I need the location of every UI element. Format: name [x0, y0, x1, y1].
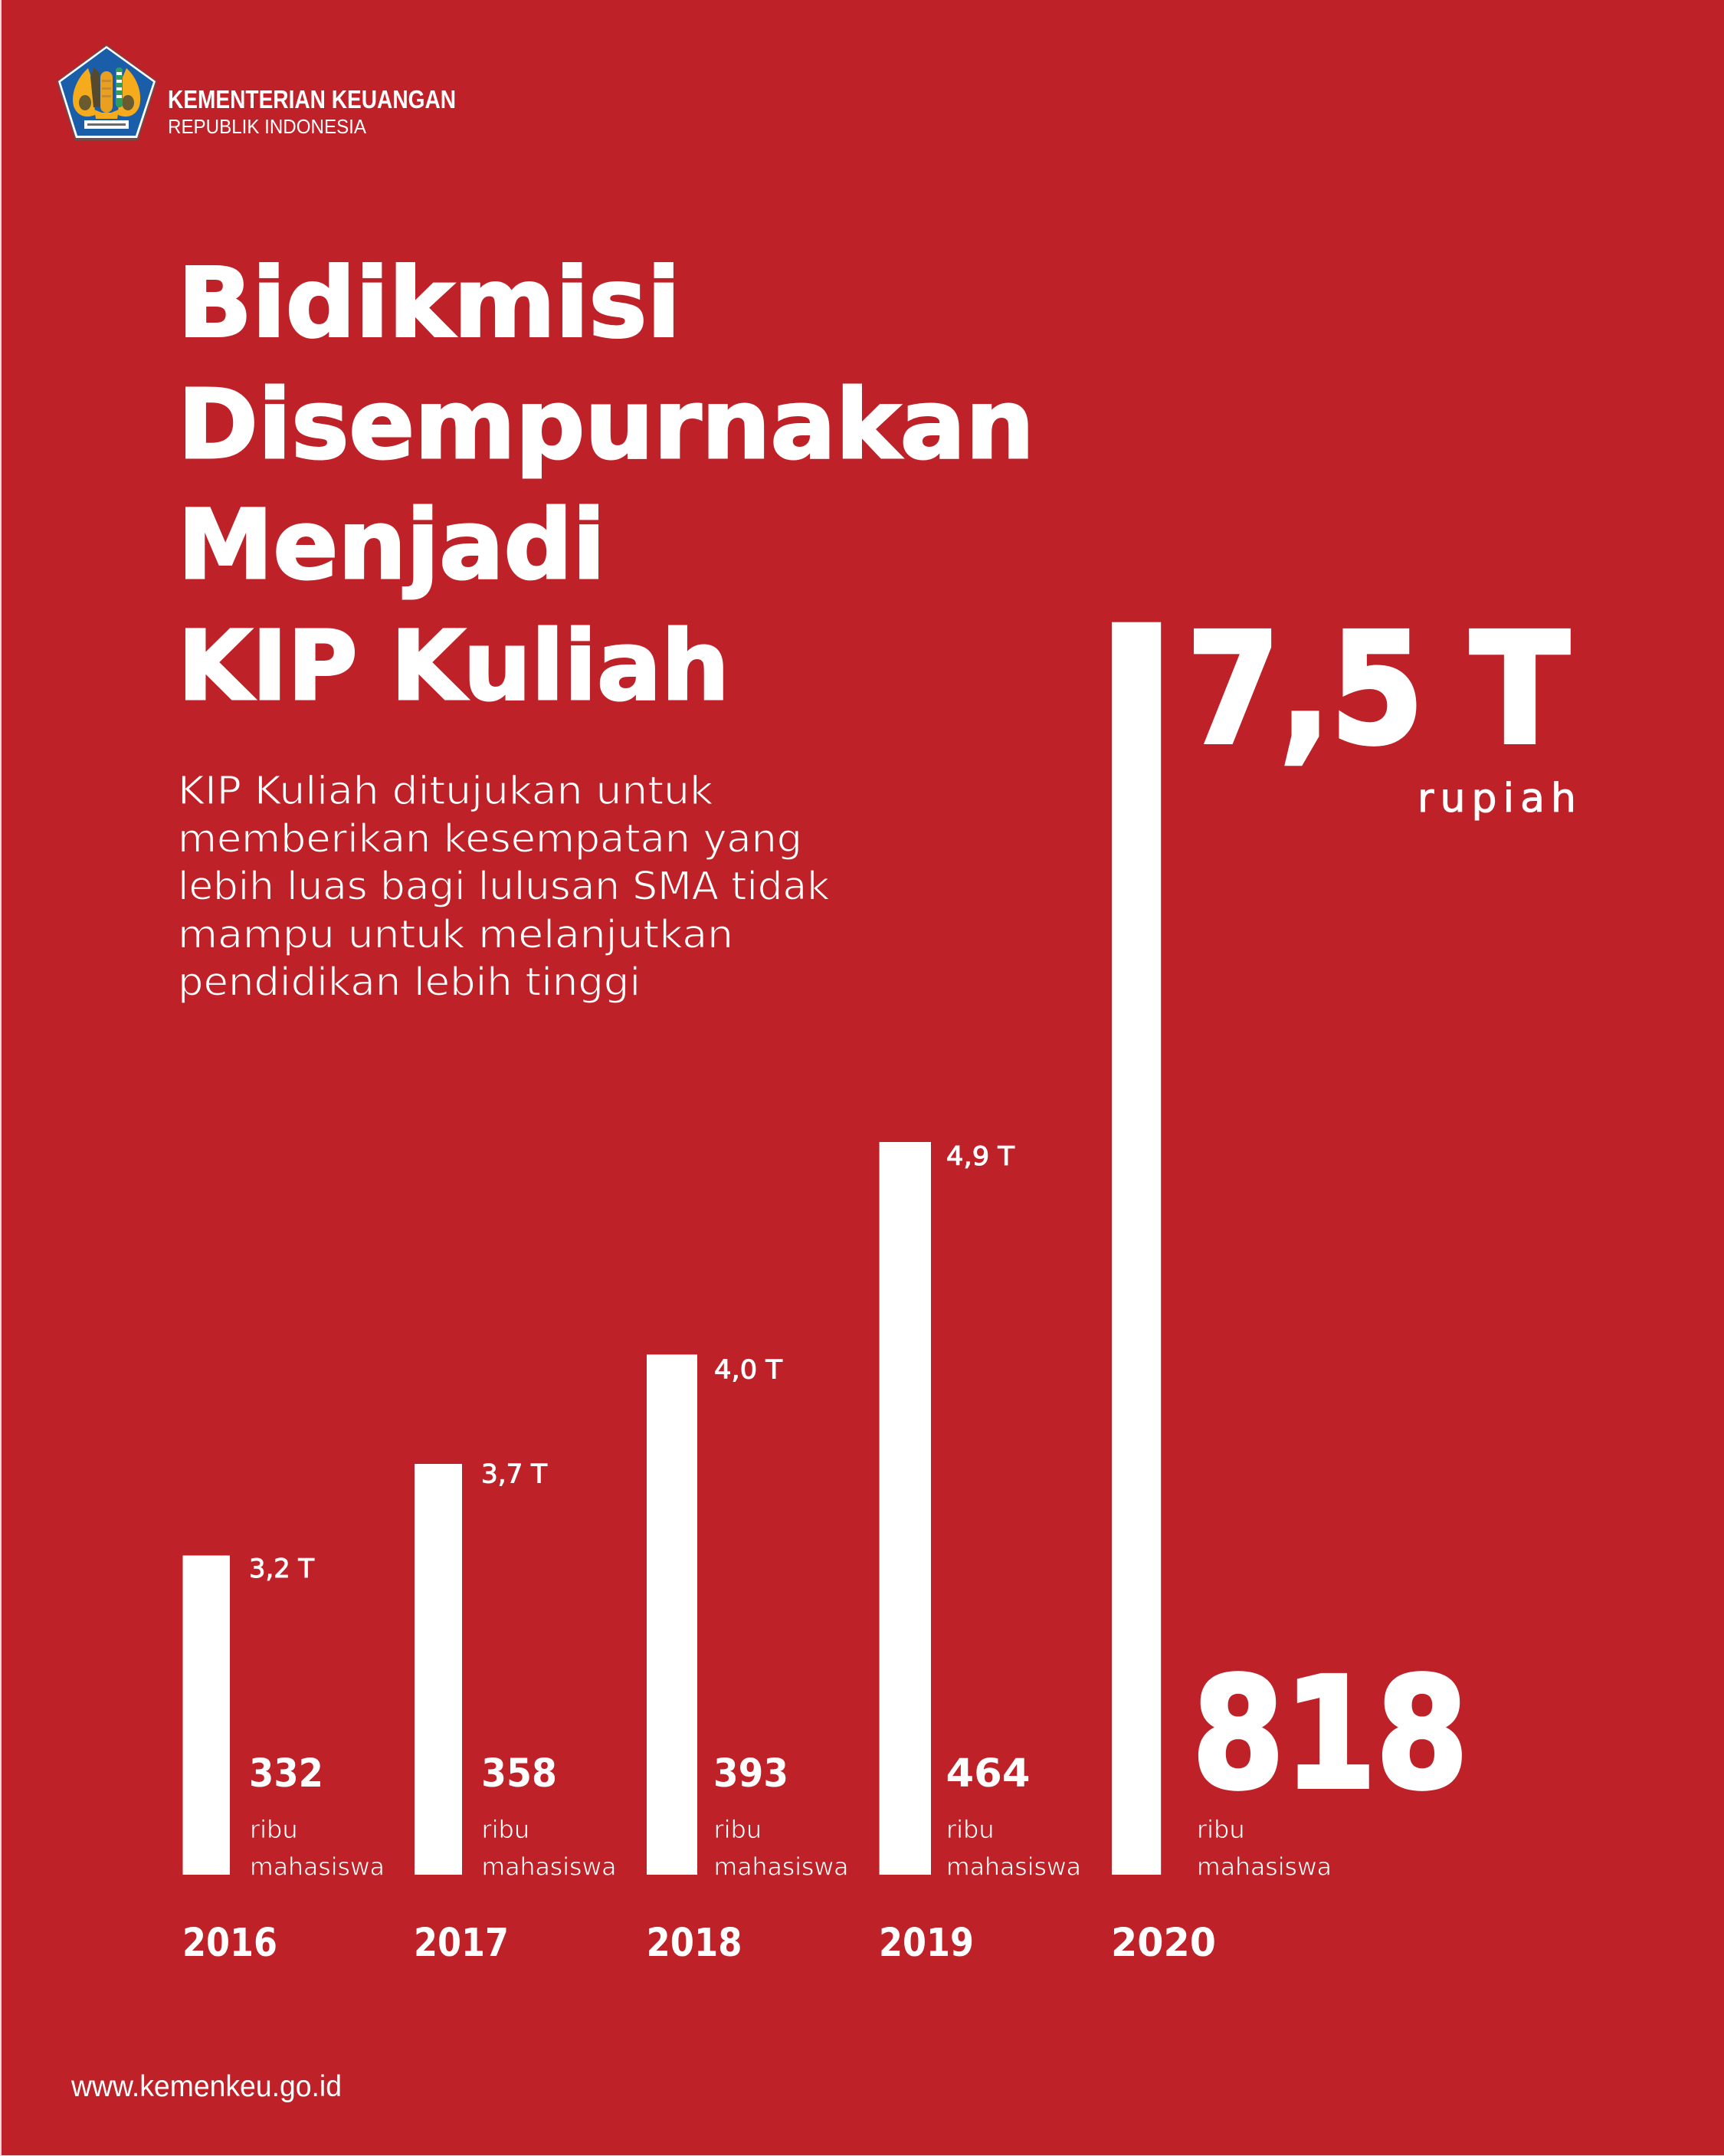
intro paragraph: mampu untuk melanjutkan [178, 912, 733, 958]
column 2019 [879, 1141, 1081, 1966]
intro paragraph: KIP Kuliah ditujukan untuk [178, 769, 713, 814]
column 2016: ribu [250, 1815, 298, 1844]
column 2018: 4,0 T [714, 1355, 782, 1386]
column 2017: mahasiswa [481, 1852, 616, 1881]
intro paragraph [178, 769, 830, 1006]
column 2019: mahasiswa [946, 1852, 1081, 1881]
column 2018: mahasiswa [714, 1852, 849, 1881]
intro paragraph: memberikan kesempatan yang [178, 817, 802, 861]
column 2020: ribu [1197, 1815, 1245, 1844]
column 2016 [182, 1554, 385, 1966]
column 2020: T [1470, 600, 1569, 778]
column 2019: 4,9 T [946, 1141, 1014, 1172]
icon: ministry crest [57, 44, 157, 140]
column 2018: 393 [713, 1751, 788, 1797]
column 2017: 3,7 T [481, 1459, 547, 1490]
column 2020: 7,5 [1187, 600, 1424, 778]
title: Menjadi [178, 490, 605, 601]
column 2020 [1111, 600, 1576, 1966]
column 2016: 2016 [182, 1921, 277, 1966]
column 2020: 818 [1192, 1645, 1468, 1823]
column 2016: mahasiswa [250, 1852, 385, 1881]
intro paragraph: lebih luas bagi lulusan SMA tidak [178, 865, 830, 909]
column 2019: 464 [946, 1751, 1030, 1797]
column 2017: 358 [481, 1751, 557, 1797]
title: Bidikmisi [178, 248, 680, 359]
intro paragraph: pendidikan lebih tinggi [178, 960, 641, 1006]
column 2017: ribu [481, 1815, 529, 1844]
bar chart: budget and students by year [182, 600, 1576, 1966]
column 2018: ribu [714, 1815, 762, 1844]
column 2016: 332 [249, 1751, 323, 1797]
column 2020: 2020 [1111, 1921, 1216, 1966]
header: ministry logo and name [57, 44, 456, 140]
title [178, 248, 1034, 722]
column 2016: 3,2 T [249, 1554, 314, 1584]
title: KIP Kuliah [178, 611, 729, 722]
title: Disempurnakan [178, 369, 1034, 481]
column 2020: rupiah [1418, 776, 1576, 822]
column 2018: 2018 [647, 1921, 742, 1966]
column 2018 [647, 1354, 849, 1966]
ministry name: KEMENTERIAN KEUANGAN [168, 85, 456, 113]
column 2019: 2019 [879, 1921, 974, 1966]
column 2020: mahasiswa [1197, 1852, 1332, 1881]
website footer: www.kemenkeu.go.id [70, 2070, 342, 2103]
republic name: REPUBLIK INDONESIA [168, 115, 367, 138]
column 2017 [414, 1459, 616, 1966]
column 2017: 2017 [414, 1921, 509, 1966]
column 2019: ribu [946, 1815, 995, 1844]
